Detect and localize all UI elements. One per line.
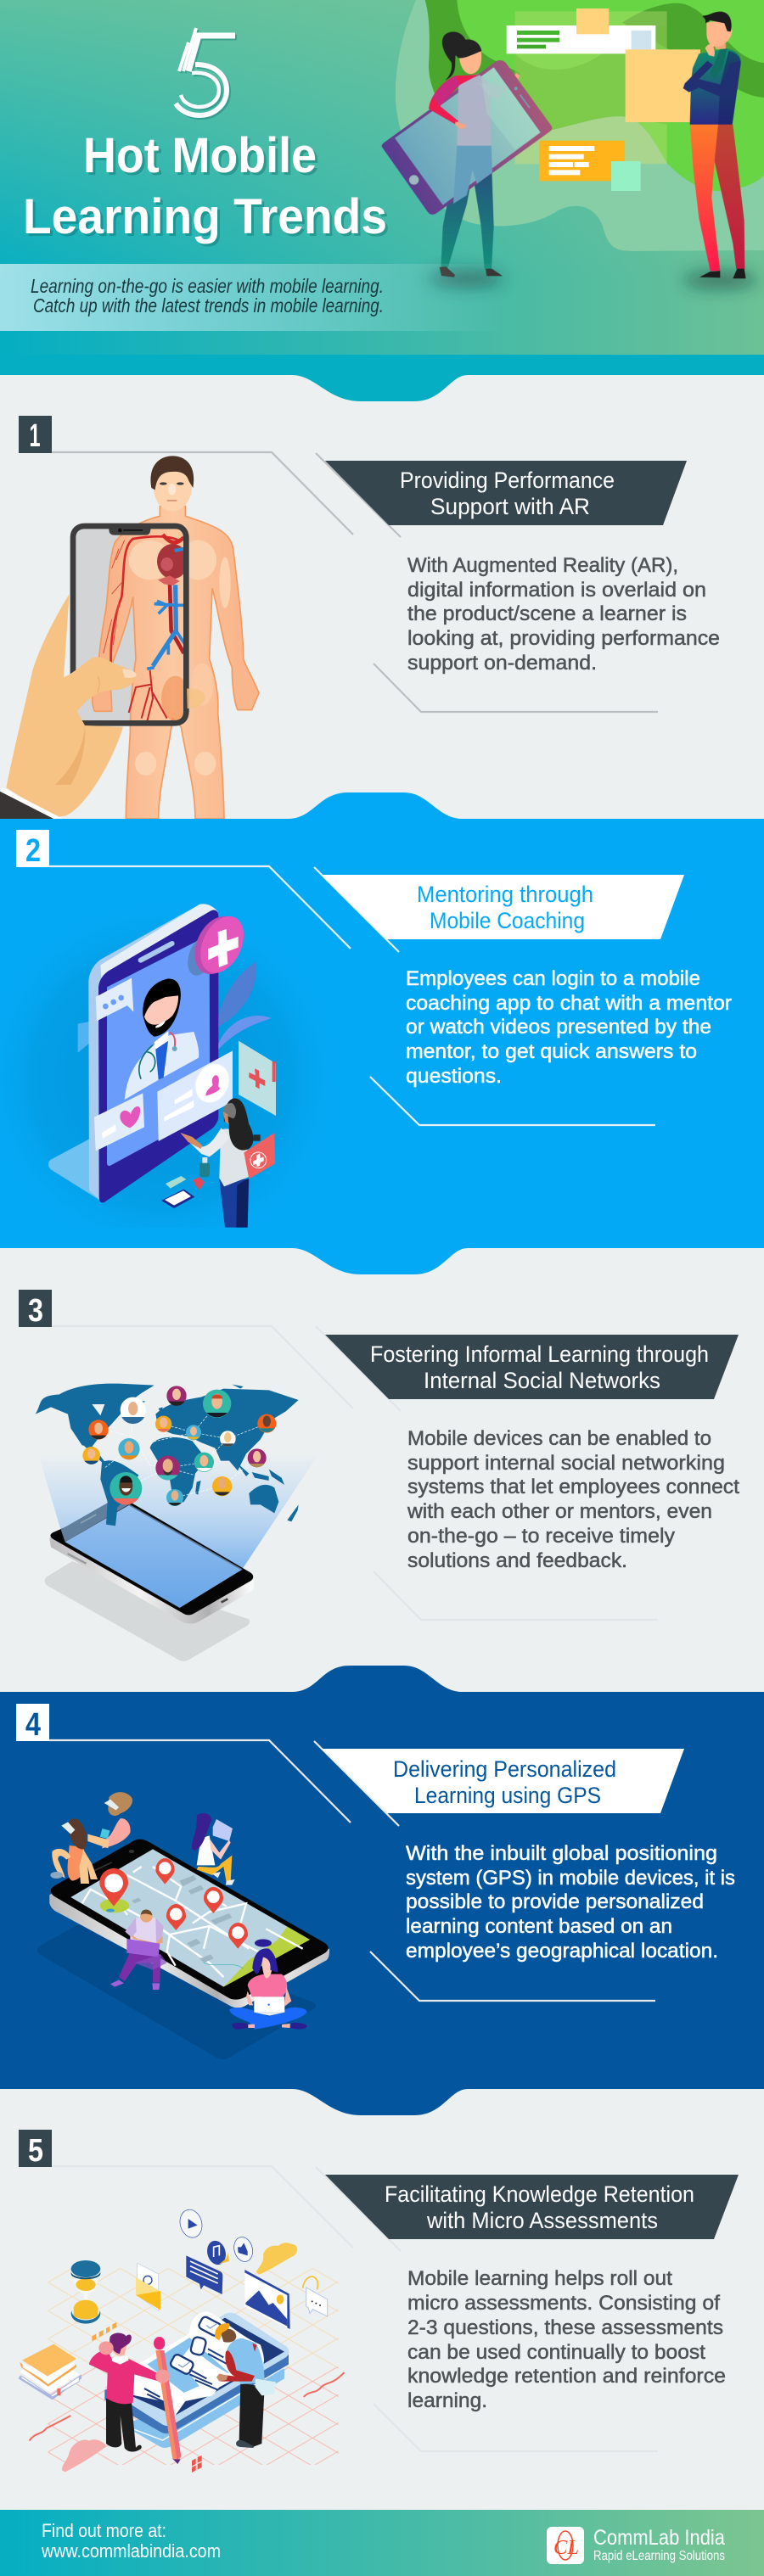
find out more text: www.commlabindia.com xyxy=(41,2540,221,2562)
map pins xyxy=(99,1858,248,1949)
heading banner: Mobile Coaching xyxy=(430,908,585,933)
woman with bag xyxy=(181,1098,275,1228)
avatars xyxy=(82,1386,276,1506)
woman with phone xyxy=(382,31,552,277)
body text: With the inbuilt global positioning xyxy=(406,1842,717,1865)
body text: the product/scene a learner is xyxy=(407,602,687,625)
section 3: informal learning xyxy=(19,1290,739,1661)
picture card xyxy=(244,2270,290,2329)
body text: can be used continually to boost xyxy=(407,2341,705,2364)
heading banner: Mentoring through xyxy=(417,882,593,907)
heading banner xyxy=(325,1335,739,1399)
body text: learning. xyxy=(407,2389,487,2412)
man anatomy xyxy=(93,456,259,819)
section 1: performance support with AR xyxy=(0,416,720,819)
logo: CL xyxy=(553,2537,579,2559)
holding hand xyxy=(0,594,205,819)
logo: Rapid eLearning Solutions xyxy=(593,2549,725,2563)
body text: with each other or mentors, even xyxy=(407,1500,712,1523)
find out more text xyxy=(41,2520,221,2562)
cards xyxy=(507,8,700,191)
section 4: personalized learning using GPS xyxy=(0,1666,764,2115)
body text: knowledge retention and reinforce xyxy=(407,2365,726,2388)
illustration: phone with map pins xyxy=(37,1792,329,2059)
profile card xyxy=(157,1050,236,1141)
illustration: assessment on phone xyxy=(19,2207,344,2472)
body text: micro assessments. Consisting of xyxy=(407,2292,720,2315)
hourglass xyxy=(71,2260,100,2324)
intro text: Catch up with the latest trends in mobile learning. xyxy=(33,294,384,316)
body text: or watch videos presented by the xyxy=(406,1016,711,1039)
illustration: body AR through phone xyxy=(0,456,259,819)
connector lines xyxy=(52,2166,658,2451)
body text xyxy=(407,2267,726,2412)
heading banner xyxy=(325,2175,739,2239)
body text: support internal social networking xyxy=(407,1452,725,1475)
med card xyxy=(239,1041,276,1116)
illustration: world map with phone xyxy=(34,1384,325,1661)
number 1 badge xyxy=(19,416,52,454)
number 5 emblem xyxy=(176,28,235,115)
squares and wave decorations xyxy=(30,2322,344,2472)
number 3 badge: 3 xyxy=(28,1293,43,1329)
woman with pencil xyxy=(89,2332,181,2464)
heart card xyxy=(94,1093,144,1151)
heading banner: Providing Performance xyxy=(400,468,615,493)
small items xyxy=(161,1157,210,1208)
heading banner xyxy=(325,461,687,525)
logo: CommLab India xyxy=(593,2526,725,2550)
number 5 badge xyxy=(19,2130,52,2169)
connector lines xyxy=(52,452,658,712)
intro text: Learning on-the-go is easier with mobile learning. xyxy=(31,275,384,297)
doctor xyxy=(125,978,199,1100)
man thinking xyxy=(683,12,746,278)
leaves xyxy=(218,961,256,1027)
header panel xyxy=(0,0,764,401)
envelope xyxy=(136,2263,160,2310)
body text: learning content based on an xyxy=(406,1915,672,1938)
body text xyxy=(406,967,732,1088)
body text: on-the-go – to receive timely xyxy=(407,1525,675,1548)
number 2 badge: 2 xyxy=(25,833,41,869)
body text: systems that let employees connect xyxy=(407,1476,739,1498)
veins and heart xyxy=(104,535,188,721)
number 3 badge xyxy=(19,1290,52,1329)
shadows under figures xyxy=(429,270,757,288)
seated people xyxy=(50,1792,307,2030)
body text: possible to provide personalized xyxy=(406,1890,704,1913)
body text xyxy=(407,1427,739,1572)
header illustration xyxy=(382,0,764,288)
number 2 badge xyxy=(16,830,49,869)
phone xyxy=(49,1500,255,1624)
body text: digital information is overlaid on xyxy=(407,579,706,602)
chat and media icons xyxy=(177,2207,297,2294)
footer xyxy=(0,2510,764,2576)
body text xyxy=(406,1842,735,1963)
phone with document xyxy=(104,2311,289,2448)
find out more text: Find out more at: xyxy=(42,2520,166,2541)
number 4 badge: 4 xyxy=(25,1707,41,1743)
heading banner: with Micro Assessments xyxy=(426,2208,658,2233)
connector lines xyxy=(49,866,655,1125)
number 1 badge: 1 xyxy=(29,418,41,454)
heading banner: Learning using GPS xyxy=(414,1783,601,1808)
title: Hot Mobile xyxy=(83,128,317,183)
body text: 2-3 questions, these assessments xyxy=(407,2316,723,2339)
map xyxy=(36,1384,299,1526)
heading banner xyxy=(322,875,684,939)
phone xyxy=(88,904,218,1202)
body text: Mobile devices can be enabled to xyxy=(407,1427,711,1450)
body text: support on-demand. xyxy=(407,652,597,675)
intro text xyxy=(31,275,384,316)
man with helmet xyxy=(215,2323,276,2448)
bubble and ring xyxy=(303,2276,328,2316)
body text: questions. xyxy=(406,1065,502,1088)
chat bubble xyxy=(96,978,133,1021)
body text: employee’s geographical location. xyxy=(406,1940,718,1963)
phone shadow xyxy=(44,1561,250,1661)
body text xyxy=(407,554,720,675)
heading banner: Facilitating Knowledge Retention xyxy=(385,2181,694,2207)
books xyxy=(19,2344,81,2400)
phone frame xyxy=(73,526,186,723)
section 5: micro assessments xyxy=(19,2130,739,2472)
body text: With Augmented Reality (AR), xyxy=(407,554,678,577)
number 4 badge xyxy=(16,1704,49,1743)
heading banner xyxy=(322,1749,684,1813)
section 2: mobile coaching xyxy=(0,792,764,1274)
title: Learning Trends xyxy=(23,189,387,244)
connector lines xyxy=(49,1740,655,2001)
body text: coaching app to chat with a mentor xyxy=(406,992,732,1015)
body text: solutions and feedback. xyxy=(407,1549,627,1572)
illustration: doctor on phone xyxy=(48,904,276,1228)
body text: looking at, providing performance xyxy=(407,627,720,650)
heading banner: Internal Social Networks xyxy=(424,1368,660,1393)
connector lines xyxy=(52,1326,658,1620)
body text: Mobile learning helps roll out xyxy=(407,2267,672,2290)
heading banner: Delivering Personalized xyxy=(393,1756,616,1782)
body text: mentor, to get quick answers to xyxy=(406,1040,697,1063)
plus badge xyxy=(183,909,252,982)
title xyxy=(23,128,387,244)
heading banner: Support with AR xyxy=(430,494,590,519)
phone xyxy=(49,1840,329,2008)
logo xyxy=(547,2526,725,2564)
number 5 badge: 5 xyxy=(28,2133,43,2169)
body text: system (GPS) in mobile devices, it is xyxy=(406,1867,735,1890)
intro band xyxy=(0,264,509,331)
heading banner: Fostering Informal Learning through xyxy=(370,1341,709,1367)
body text: Employees can login to a mobile xyxy=(406,967,700,990)
